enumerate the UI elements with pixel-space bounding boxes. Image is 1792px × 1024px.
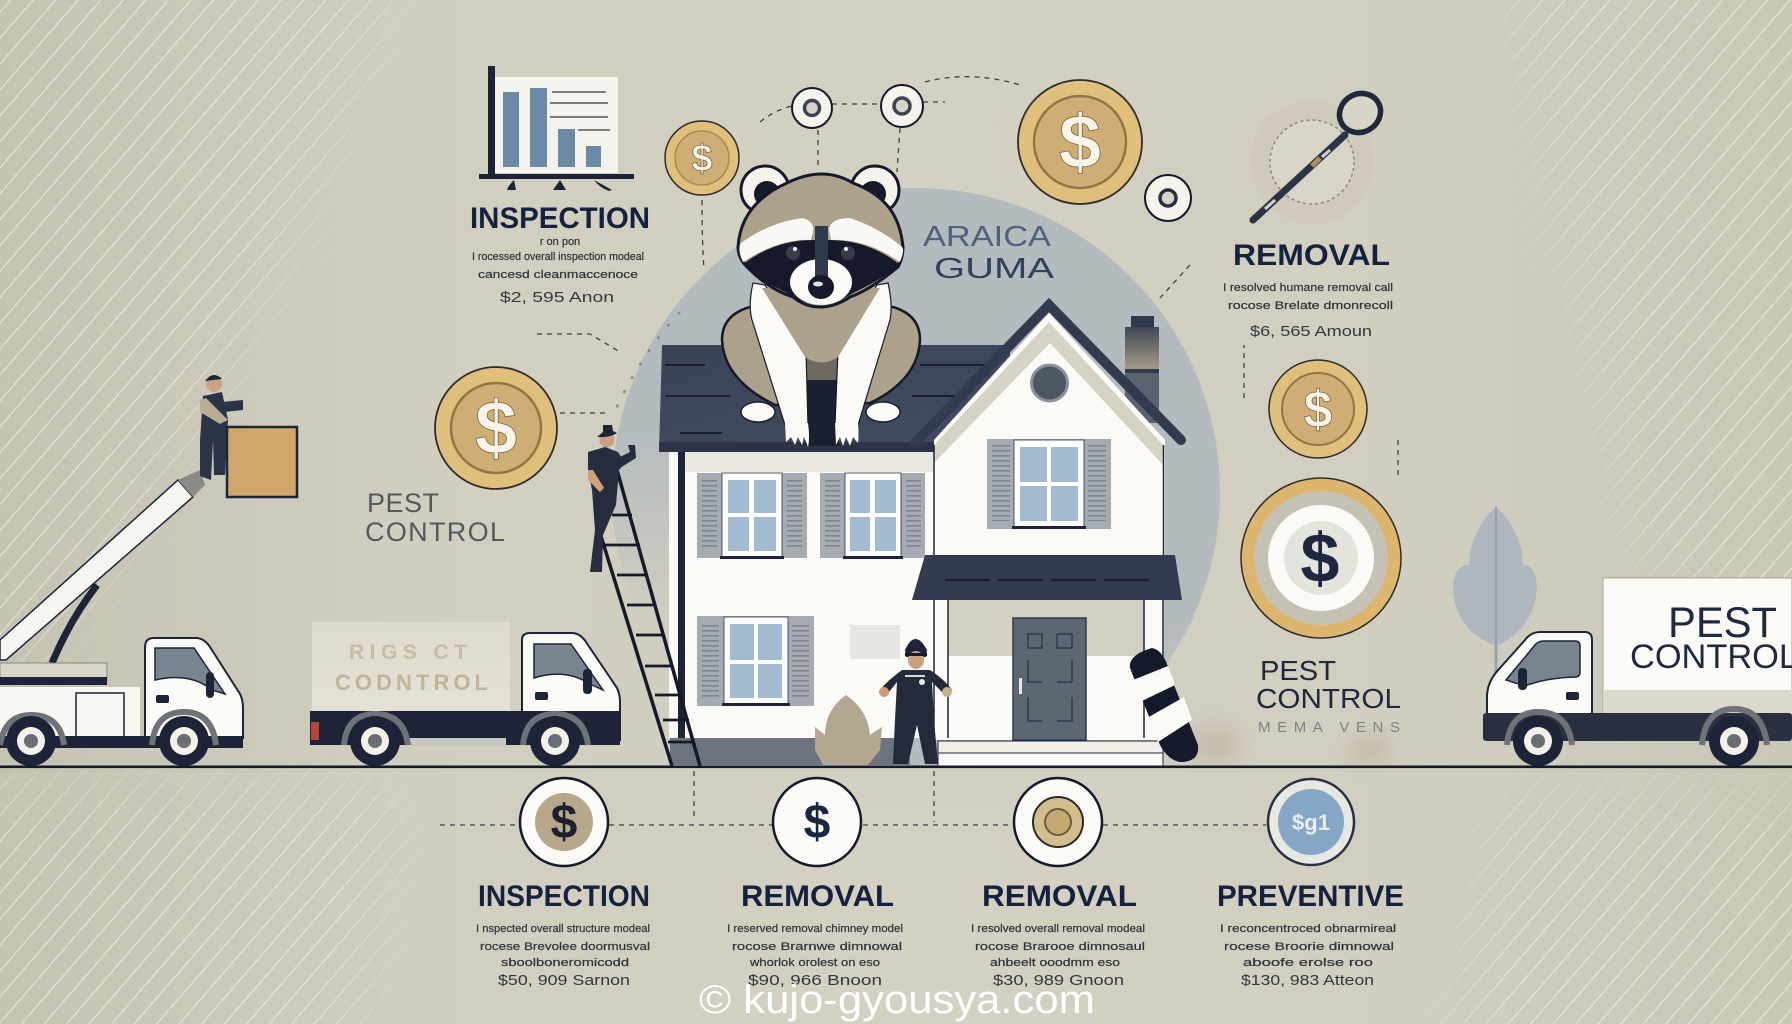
box — [227, 427, 297, 497]
ground line — [0, 766, 1792, 768]
step icon: preventive: $g1 — [1292, 810, 1330, 835]
step icon: inspection: $ — [551, 796, 578, 849]
heading: inspection: cancesd cleanmaccenoce — [478, 269, 638, 281]
raccoon ears — [741, 166, 899, 214]
column: removal second: $30, 989 Gnoon — [993, 972, 1124, 989]
truck middle: RIGS CT — [349, 641, 467, 664]
column: preventive: aboofe erolse roo — [1243, 957, 1373, 969]
main roof — [659, 345, 1010, 452]
heading: removal — [1223, 239, 1393, 340]
coin: right large with dark dollar — [1241, 478, 1401, 638]
decorative leaf tree — [1453, 507, 1537, 675]
heading: inspection — [470, 202, 650, 306]
truck middle: CODNTROL — [335, 670, 488, 695]
label: araica guma: GUMA — [934, 253, 1055, 285]
dashed connectors — [440, 77, 1398, 825]
label: pest control left: CONTROL — [365, 517, 505, 547]
label: araica guma — [923, 221, 1055, 285]
raccoon front paws — [785, 423, 858, 447]
raccoon legs — [750, 283, 891, 425]
coin: upper centre — [1018, 80, 1142, 204]
raccoon head — [738, 174, 903, 307]
heading: removal: $6, 565 Amoun — [1250, 323, 1372, 340]
label: pest control right: PEST — [1260, 655, 1336, 686]
ladder — [600, 470, 700, 766]
column: inspection — [476, 880, 650, 989]
house base strip — [670, 738, 910, 766]
column: inspection: INSPECTION — [478, 880, 650, 913]
heading: inspection: INSPECTION — [470, 202, 650, 235]
window lower left — [697, 616, 814, 706]
column: inspection: rocese Brevolee doormusval — [480, 941, 650, 953]
watermark: © kujo-gyousya.com — [699, 978, 1095, 1022]
raccoon back paws — [741, 402, 900, 422]
coin: right small: $ — [1304, 381, 1333, 439]
coin: right large with dark dollar: $ — [1301, 519, 1339, 597]
column: removal second: rocose Brarooe dimnosaul — [975, 941, 1145, 953]
gable — [934, 313, 1165, 560]
column: preventive — [1217, 880, 1404, 989]
heading: inspection: $2, 595 Anon — [500, 289, 614, 306]
label: pest control right — [1256, 655, 1401, 736]
tool icon: removal — [1250, 86, 1388, 224]
label: pest control left: PEST — [367, 488, 439, 518]
coin: upper centre: $ — [1059, 100, 1101, 185]
heading: removal: rocose Brelate dmonrecoll — [1228, 300, 1393, 312]
steps — [938, 741, 1163, 766]
window gable — [987, 439, 1111, 529]
coin: right small — [1269, 360, 1367, 458]
heading: removal: REMOVAL — [1233, 239, 1390, 272]
step icon: inspection — [520, 778, 608, 866]
ghost window — [850, 625, 900, 659]
worker on ladder — [588, 425, 636, 572]
shrub — [815, 695, 882, 765]
chart icon: inspection — [479, 66, 634, 191]
column: removal second: ahbeelt ooodmm eso — [990, 957, 1120, 969]
truck right — [1483, 578, 1792, 766]
column: removal — [727, 880, 903, 989]
house — [659, 305, 1182, 766]
step icon: removal coin — [1014, 778, 1102, 866]
column: preventive: $130, 983 Atteon — [1241, 972, 1374, 989]
step icon: preventive — [1268, 779, 1354, 865]
raccoon belly — [805, 355, 839, 446]
door — [1013, 618, 1086, 740]
window upper left — [697, 473, 807, 559]
man in front of house — [879, 639, 952, 764]
label: araica guma: ARAICA — [923, 221, 1052, 253]
truck right: CONTROL — [1630, 638, 1792, 676]
truck left — [0, 638, 243, 766]
window upper right — [820, 473, 925, 559]
column: removal second: I resolved overall removal modeal — [971, 923, 1145, 935]
truck right: PEST — [1668, 599, 1777, 647]
column: preventive: rocese Broorie dimnowal — [1224, 941, 1394, 953]
main wall — [669, 452, 939, 738]
coin: upper left: $ — [691, 138, 713, 180]
small circle icon 2 — [881, 85, 923, 127]
step icon: removal dollar — [773, 778, 861, 866]
column: preventive: PREVENTIVE — [1217, 880, 1404, 913]
coin: left big: $ — [475, 386, 517, 471]
step icon: removal dollar: $ — [804, 796, 831, 849]
worker on lift — [200, 375, 243, 480]
porch — [912, 555, 1182, 740]
label: pest control right: CONTROL — [1256, 683, 1401, 714]
heading: removal: I resolved humane removal call — [1223, 282, 1393, 294]
grey backdrop circle — [590, 188, 1230, 807]
column: inspection: I nspected overall structure modeal — [476, 923, 650, 935]
column: removal: $90, 966 Bnoon — [748, 972, 882, 989]
small circle icon 1 — [792, 88, 832, 128]
coin: upper left — [665, 121, 739, 195]
chimney — [1125, 316, 1159, 423]
label: pest control right: MEMA VENS — [1258, 719, 1400, 736]
raccoon — [722, 166, 920, 447]
raccoon bib — [762, 288, 880, 362]
smudges near the porch — [1189, 725, 1392, 766]
column: removal: REMOVAL — [741, 880, 894, 913]
column: inspection: $50, 909 Sarnon — [498, 972, 630, 989]
column: preventive: I reconcentroced obnarmireal — [1220, 923, 1396, 935]
column: removal second: REMOVAL — [982, 880, 1137, 913]
column: removal second — [971, 880, 1145, 989]
truck middle — [310, 622, 620, 766]
coin: left big — [435, 367, 557, 489]
raccoon tail — [1130, 648, 1198, 762]
heading: inspection: I rocessed overall inspection modeal — [472, 251, 644, 263]
boom lift — [0, 470, 205, 663]
label: pest control left — [365, 488, 505, 547]
column: removal: rocose Brarnwe dimnowal — [732, 941, 902, 953]
small circle icon 3 — [1145, 175, 1191, 221]
column: inspection: sboolboneromicodd — [501, 957, 629, 969]
column: removal: I reserved removal chimney model — [727, 923, 903, 935]
column: removal: whorlok orolest on eso — [749, 957, 880, 969]
raccoon haunches — [722, 307, 920, 405]
heading: inspection: r on pon — [540, 236, 580, 248]
gable vent — [1032, 365, 1068, 401]
